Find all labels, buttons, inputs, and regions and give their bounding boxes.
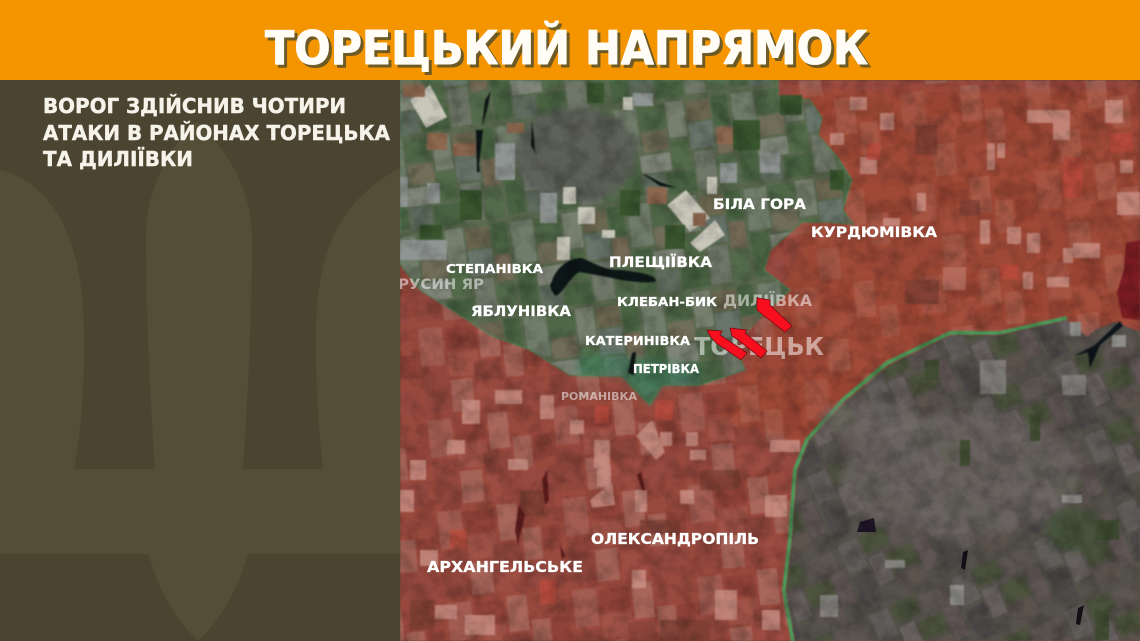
bright place labels: ПЕТРІВКА — [633, 362, 700, 376]
reservoirs and ponds — [476, 91, 677, 375]
city: Horlivka area — [840, 413, 1080, 537]
bright place labels: АРХАНГЕЛЬСЬКЕ — [427, 558, 583, 576]
bright place labels: СТЕПАНІВКА — [446, 261, 543, 276]
texture overlay — [400, 80, 1140, 641]
satellite map — [398, 80, 1140, 641]
bright place labels: БІЛА ГОРА — [713, 197, 807, 213]
map zone: Ukrainian-held green territory — [400, 80, 853, 405]
bright place labels: ЯБЛУНІВКА — [471, 304, 572, 320]
arrow: Toretsk north — [730, 328, 767, 358]
bright place labels: ПЛЕЩІЇВКА — [609, 254, 713, 271]
dim place labels: РОМАНІВКА — [561, 390, 637, 403]
panel text: attack summary: АТАКИ В РАЙОНАХ ТОРЕЦЬКА — [43, 120, 390, 145]
left text panel — [0, 80, 400, 641]
bright place labels: ОЛЕКСАНДРОПІЛЬ — [591, 530, 759, 548]
green tint strip — [575, 355, 700, 405]
dim place labels: ТОРЕЦЬК — [694, 332, 825, 361]
title: ТОРЕЦЬКИЙ НАПРЯМОК — [265, 21, 868, 75]
map zone: occupied gray territory — [786, 320, 1140, 641]
header banner — [0, 0, 1140, 80]
bright place labels: КУРДЮМІВКА — [811, 225, 938, 241]
map zone: green front line around gray territory — [784, 318, 1067, 641]
arrow: Diliivka — [757, 298, 792, 332]
bright place labels: КАТЕРИНІВКА — [585, 333, 690, 348]
title: ТОРЕЦЬКИЙ НАПРЯМОК — [268, 24, 871, 78]
arrow: Toretsk west — [707, 330, 747, 360]
water: dark red reservoir — [1117, 240, 1140, 320]
panel text: attack summary: ТА ДИЛІЇВКИ — [43, 146, 193, 171]
dim place labels: ДИЛІЇВКА — [723, 291, 813, 310]
bright place labels: КЛЕБАН-БИК — [617, 294, 718, 309]
bright place labels — [427, 197, 938, 576]
dim place labels: РУСИН ЯР — [398, 277, 484, 293]
map zone: occupied red territory — [400, 80, 1140, 641]
icon: trident watermark — [0, 122, 400, 641]
dim place labels — [398, 277, 825, 403]
panel text: attack summary — [43, 93, 390, 171]
city: Kostiantynivka area — [513, 107, 637, 203]
arrows: attack directions — [707, 298, 792, 360]
light fields — [410, 85, 725, 260]
panel text: attack summary: ВОРОГ ЗДІЙСНИВ ЧОТИРИ — [43, 93, 346, 118]
